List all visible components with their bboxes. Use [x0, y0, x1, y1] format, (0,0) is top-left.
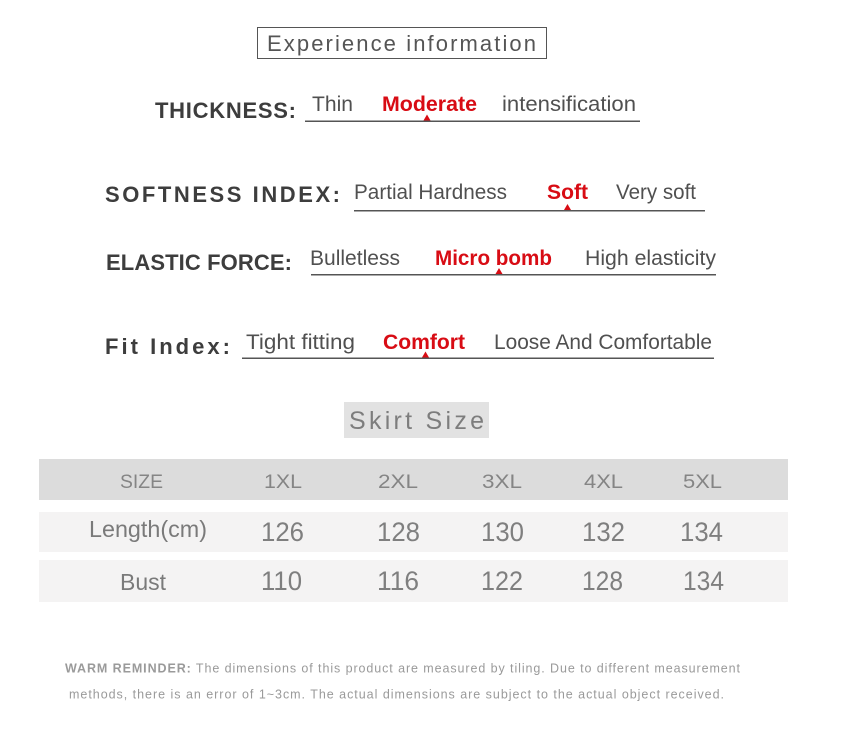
table row: length: Length(cm) [89, 516, 207, 542]
scale: fit index: Comfort [383, 331, 465, 354]
scale: elastic force: ELASTIC FORCE: [106, 250, 292, 275]
table header row: 4XL [584, 471, 623, 493]
table row: bust: 122 [481, 566, 523, 596]
table header row: 1XL [264, 471, 302, 493]
warm reminder note: WARM REMINDER: The dimensions of this product are measured by tiling. Due to different measurement [65, 662, 741, 676]
scale: softness index: Partial Hardness [354, 181, 507, 204]
size table [39, 459, 788, 602]
table header row: 3XL [482, 471, 522, 493]
scale: elastic force: High elasticity [585, 247, 716, 270]
table row: bust: Bust [120, 569, 167, 595]
scale: thickness: Moderate [382, 93, 477, 116]
table header row: SIZE [120, 471, 163, 493]
table row: length: 126 [261, 517, 304, 547]
table header row [39, 459, 788, 500]
table header row: 5XL [683, 471, 722, 493]
warm reminder note: methods, there is an error of 1~3cm. The actual dimensions are subject to the actual object received. [69, 688, 724, 702]
scale: fit index: Tight fitting [246, 331, 355, 354]
scale: elastic force: Micro bomb [435, 247, 552, 270]
table row: length: 132 [582, 517, 625, 547]
scale: thickness: intensification [502, 93, 636, 116]
table row: bust: 116 [377, 566, 419, 596]
scale: thickness: Thin [312, 93, 353, 116]
table row: bust [39, 560, 788, 602]
scale: softness index [105, 181, 705, 212]
scale: softness index: SOFTNESS INDEX: [105, 182, 340, 207]
scale: fit index: Fit Index: [105, 334, 230, 359]
table row: length: 134 [680, 517, 723, 547]
warm reminder note [65, 662, 741, 702]
table row: bust: 134 [683, 566, 724, 596]
scale: fit index [105, 331, 714, 359]
scale: elastic force: Bulletless [310, 247, 400, 270]
scale: elastic force [106, 247, 716, 276]
scale: softness index: Soft [547, 181, 588, 204]
table header row: 2XL [378, 471, 418, 493]
heading: Skirt Size: Skirt Size [349, 407, 484, 435]
scale: softness index: Very soft [616, 181, 696, 204]
table row: length [39, 512, 788, 552]
scale: thickness [155, 93, 640, 123]
heading: Experience information: Experience information [267, 31, 536, 56]
scale: fit index: Loose And Comfortable [494, 331, 712, 354]
table row: length: 128 [377, 517, 420, 547]
table row: bust: 128 [582, 566, 623, 596]
scale: thickness: THICKNESS: [155, 98, 296, 123]
table row: bust: 110 [261, 566, 302, 596]
table row: length: 130 [481, 517, 524, 547]
